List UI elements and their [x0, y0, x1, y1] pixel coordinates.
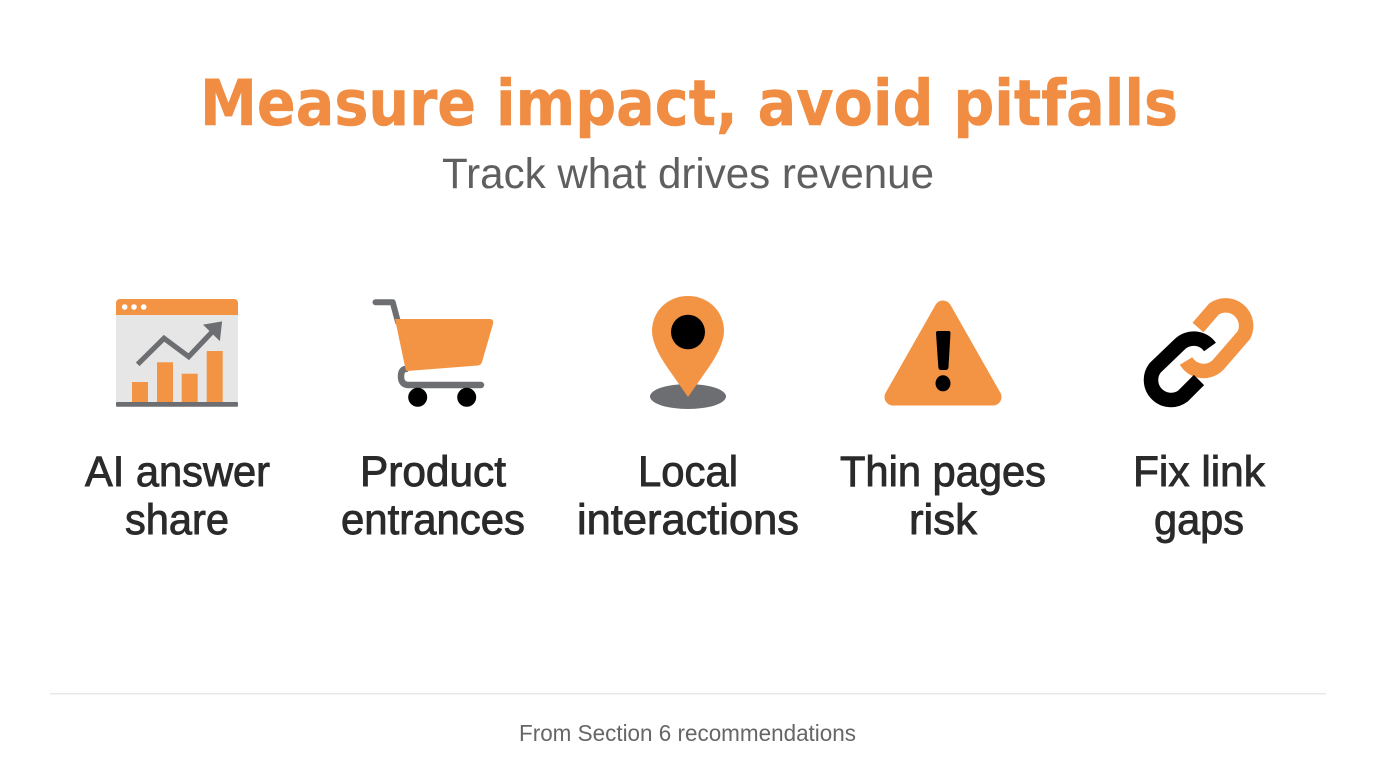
label: AI answer share: [85, 448, 270, 544]
label: Fix link gaps: Fix link: [1133, 448, 1265, 496]
label: AI answer share: AI answer: [85, 448, 270, 496]
label: Fix link gaps: gaps: [1154, 496, 1244, 544]
label: Thin pages risk: risk: [909, 496, 978, 544]
label: Local interactions: [577, 448, 799, 544]
label: Product entrances: entrances: [341, 496, 525, 544]
icon: warning triangle: [893, 309, 993, 397]
label: Thin pages risk: Thin pages: [840, 448, 1046, 496]
label: Local interactions: Local: [638, 448, 738, 496]
label: AI answer share: share: [125, 496, 229, 544]
label: Product entrances: [341, 448, 525, 544]
label: Local interactions: interactions: [577, 496, 799, 544]
subtitle: Track what drives revenue: [442, 150, 934, 198]
label: Product entrances: Product: [360, 448, 506, 496]
footer source note: From Section 6 recommendations: [519, 720, 856, 746]
icon: location pin: [650, 296, 726, 409]
label: Thin pages risk: [840, 448, 1046, 544]
title: Measure impact, avoid pitfalls: [200, 67, 1178, 140]
icon: analytics browser window: [116, 299, 238, 407]
icon: shopping cart: [376, 302, 493, 407]
label: Fix link gaps: [1133, 448, 1265, 544]
icon: broken chain link: [1151, 305, 1246, 400]
